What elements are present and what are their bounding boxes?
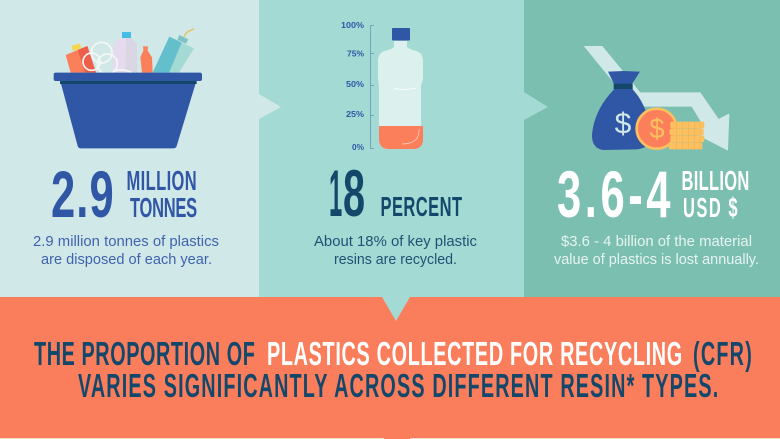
heading: banner statement: (CFR) xyxy=(693,335,752,372)
text: percent description: resins are recycled. xyxy=(334,251,457,268)
stat: 3.6-4 billion usd: 3.6-4 xyxy=(557,157,671,231)
panel: orange banner xyxy=(0,297,780,439)
stat: 2.9 million tonnes: 2.9 xyxy=(51,157,114,231)
heading: banner statement xyxy=(34,335,752,404)
icon: white notch at top xyxy=(371,0,394,7)
text: tonnes description: are disposed of each year. xyxy=(41,251,212,268)
panel: value lost xyxy=(524,0,780,297)
text: value description: $3.6 - 4 billion of the material xyxy=(561,233,752,250)
arrow: first to second panel xyxy=(259,94,281,119)
arrow: banner notch xyxy=(382,297,410,321)
text: percent description: About 18% of key plastic xyxy=(314,233,477,250)
chart: bottle fill gauge: 25% xyxy=(346,110,364,119)
icon: falling arrow with money bag: $ xyxy=(615,107,632,140)
stat: 2.9 million tonnes xyxy=(51,157,197,231)
arrow: falling value xyxy=(584,46,729,151)
stat: 3.6-4 billion usd: BILLION xyxy=(682,165,749,196)
stat: 18 percent xyxy=(329,156,462,231)
stat: 2.9 million tonnes: MILLION xyxy=(126,165,197,196)
chart: bottle fill gauge: 100% xyxy=(341,21,364,30)
heading: banner statement: PLASTICS COLLECTED FOR RECYCLING xyxy=(267,335,682,372)
chart: bottle fill gauge xyxy=(341,21,423,152)
stat: 3.6-4 billion usd xyxy=(557,157,749,231)
icon: bucket of plastics xyxy=(54,29,202,148)
text: tonnes description xyxy=(33,233,219,268)
icon: falling arrow with money bag xyxy=(584,46,729,151)
heading: banner statement: VARIES SIGNIFICANTLY ACROSS DIFFERENT RESIN* TYPES. xyxy=(78,367,718,404)
text: percent description xyxy=(314,233,477,268)
chart: bottle fill gauge: 50% xyxy=(346,80,364,89)
stat: 18 percent: PERCENT xyxy=(380,191,462,222)
chart: bottle fill gauge: 75% xyxy=(347,50,364,58)
chart: bottle fill gauge: 0% xyxy=(352,143,364,152)
text: value description xyxy=(554,233,759,268)
icon: falling arrow with money bag: $ xyxy=(649,113,665,144)
text: value description: value of plastics is lost annually. xyxy=(554,251,759,268)
heading: banner statement: THE PROPORTION OF xyxy=(34,335,255,372)
stat: 3.6-4 billion usd: USD $ xyxy=(683,192,738,223)
panel: tonnes disposed xyxy=(0,0,394,297)
panel: percent recycled xyxy=(259,0,524,297)
stat: 2.9 million tonnes: TONNES xyxy=(130,192,197,223)
stat: 18 percent: 1 xyxy=(329,156,342,231)
text: tonnes description: 2.9 million tonnes of plastics xyxy=(33,233,219,250)
arrow: second to third panel xyxy=(524,92,548,120)
stat: 18 percent: 8 xyxy=(343,157,365,231)
